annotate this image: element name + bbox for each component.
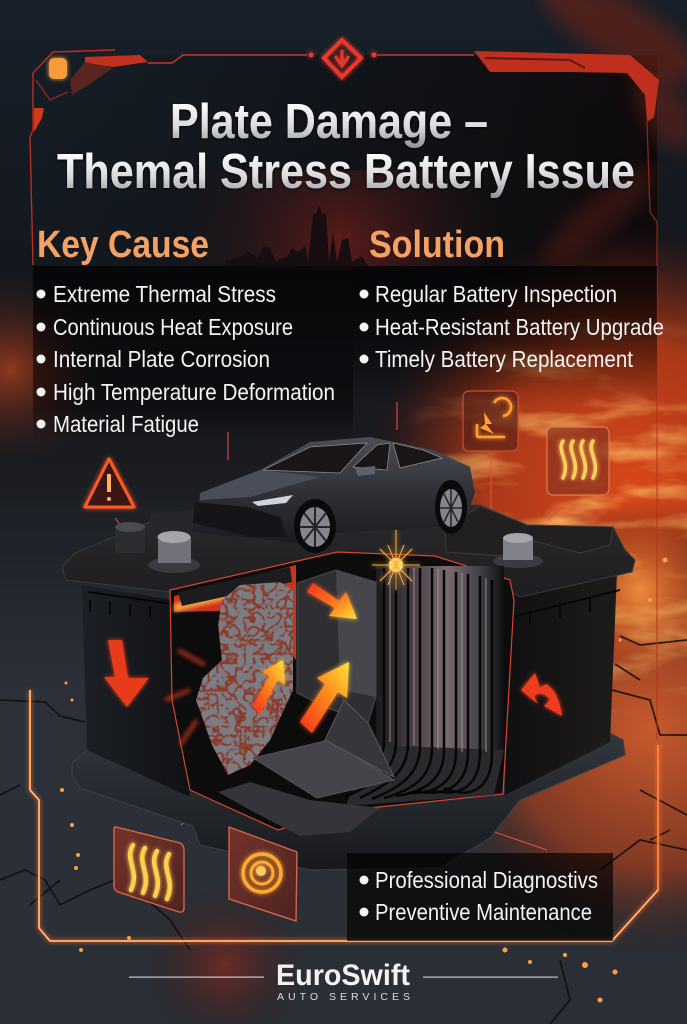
icon: target floor card [229, 827, 297, 921]
title [57, 95, 635, 199]
battery lid [62, 500, 635, 597]
corroded plate rubble [196, 582, 293, 775]
panel: extra solutions backdrop [347, 853, 613, 941]
list: extra solutions: Professional Diagnostivs [375, 867, 598, 893]
car windows [263, 443, 442, 473]
list: key causes: Internal Plate Corrosion [53, 346, 270, 372]
terminal post left [148, 531, 200, 573]
logo: EuroSwift Auto Services: EuroSwift [276, 959, 410, 992]
icon: city skyline [226, 205, 368, 266]
top panel glow behind skyline [160, 170, 520, 270]
logo: EuroSwift Auto Services [129, 959, 558, 1003]
broken plate slab [253, 740, 394, 798]
arrow: red down on left face [104, 640, 149, 707]
list: key causes: Material Fatigue [53, 411, 199, 437]
list: key causes: Continuous Heat Exposure [53, 314, 293, 340]
icon: warning triangle [85, 459, 134, 507]
arrow: small up [253, 660, 285, 714]
icon: heat waves card [547, 427, 609, 495]
broken plate upright [297, 570, 376, 723]
icon: corner lamp [49, 58, 67, 79]
cutaway interior [170, 552, 514, 830]
icon: top diamond emblem [309, 40, 376, 77]
car hood highlight [200, 470, 320, 500]
battery illustration [62, 500, 635, 870]
car front wheel [294, 499, 336, 553]
icon: heat waves floor card [114, 827, 184, 912]
car grille and headlight [193, 495, 293, 537]
terminal cap left rear [115, 522, 145, 553]
left glow streaks [165, 650, 205, 745]
panel: solutions backdrop [353, 266, 657, 406]
molten top band [174, 565, 296, 660]
raised lid block right [445, 506, 613, 556]
icon: battery bolt card [463, 391, 518, 451]
list: key causes [36, 281, 335, 437]
sparks [60, 558, 668, 1002]
arrow: curved double on right face [521, 673, 562, 716]
list: solutions: Regular Battery Inspection [375, 281, 617, 307]
heading: Solution: Solution [369, 224, 505, 266]
callout lines [115, 402, 570, 857]
list: key causes: High Temperature Deformation [53, 379, 335, 405]
list: key causes: Extreme Thermal Stress [53, 281, 276, 307]
arrow: upper plate stress [307, 583, 357, 619]
car [192, 437, 475, 553]
battery right face [505, 572, 617, 795]
terminal post right [493, 533, 543, 568]
bottom debris [218, 782, 380, 836]
car mirror [355, 466, 375, 476]
list: solutions [360, 281, 664, 372]
logo: EuroSwift Auto Services: AUTO SERVICES [277, 991, 410, 1003]
raised lid block left [150, 510, 195, 545]
title: Plate Damage – [170, 95, 488, 149]
list: extra solutions: Preventive Maintenance [375, 899, 592, 925]
spark burst [372, 530, 420, 590]
lid ribbing [88, 590, 620, 624]
arrow: large up [300, 662, 349, 733]
list: solutions: Timely Battery Replacement [375, 346, 634, 372]
battery base and feet [72, 728, 625, 870]
internal lead plates [330, 566, 504, 806]
battery left face [82, 585, 190, 797]
heading: Key Cause: Key Cause [37, 224, 209, 266]
car rear wheel [435, 480, 467, 534]
panel: causes backdrop [33, 266, 353, 442]
broken plate wedge [325, 700, 394, 777]
list: extra solutions [360, 867, 598, 925]
